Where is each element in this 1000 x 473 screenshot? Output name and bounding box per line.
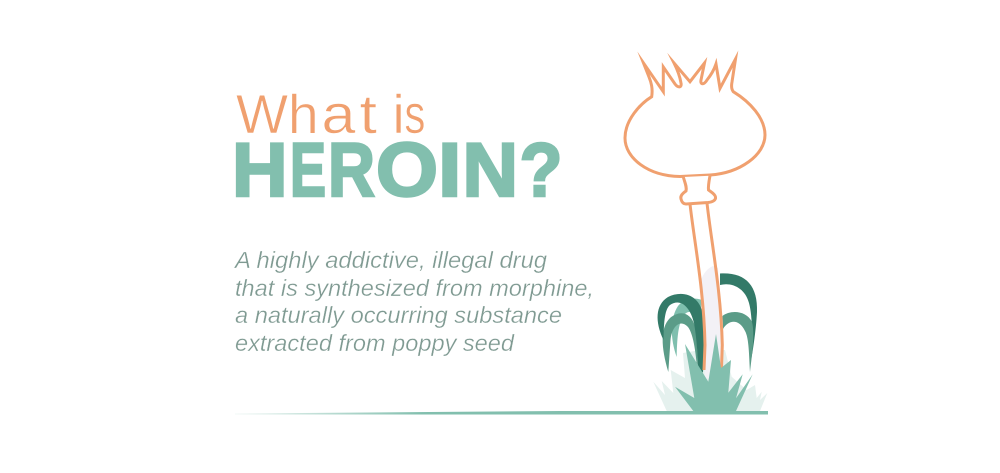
left mid leaf (663, 313, 698, 377)
left dark leaf (658, 294, 704, 377)
title: What is (236, 83, 425, 145)
title: What is: t (360, 83, 377, 145)
pale background grass (653, 350, 767, 411)
foreground grass (675, 334, 753, 411)
title: HEROIN?: N (462, 128, 518, 213)
description text: a naturally occurring substance (235, 302, 562, 328)
title: What is: W (236, 83, 288, 145)
title: What is: i (392, 83, 405, 145)
description text (233, 247, 594, 356)
title: HEROIN? (232, 128, 562, 213)
right dark leaf (720, 273, 757, 358)
illustration: poppy plant (235, 59, 768, 414)
title: What is: h (288, 83, 319, 145)
title: What is: s (404, 83, 425, 145)
title: HEROIN?: R (328, 128, 375, 213)
title: HEROIN?: O (376, 128, 438, 213)
description text: A highly addictive, illegal drug (233, 247, 547, 273)
left light leaf (672, 298, 702, 357)
description text: extracted from poppy seed (235, 330, 515, 356)
title: HEROIN?: E (290, 128, 326, 213)
title: HEROIN?: I (438, 128, 462, 213)
title: HEROIN?: ? (520, 128, 562, 213)
stem inner shading (700, 266, 722, 380)
right mid leaf (722, 312, 753, 372)
pod neck (681, 176, 716, 204)
title: HEROIN?: H (232, 128, 288, 213)
poppy stem (690, 203, 722, 370)
poppy pod head (625, 59, 765, 176)
ground line (235, 411, 768, 414)
description text: that is synthesized from morphine, (235, 275, 594, 301)
title: What is: a (322, 83, 356, 145)
